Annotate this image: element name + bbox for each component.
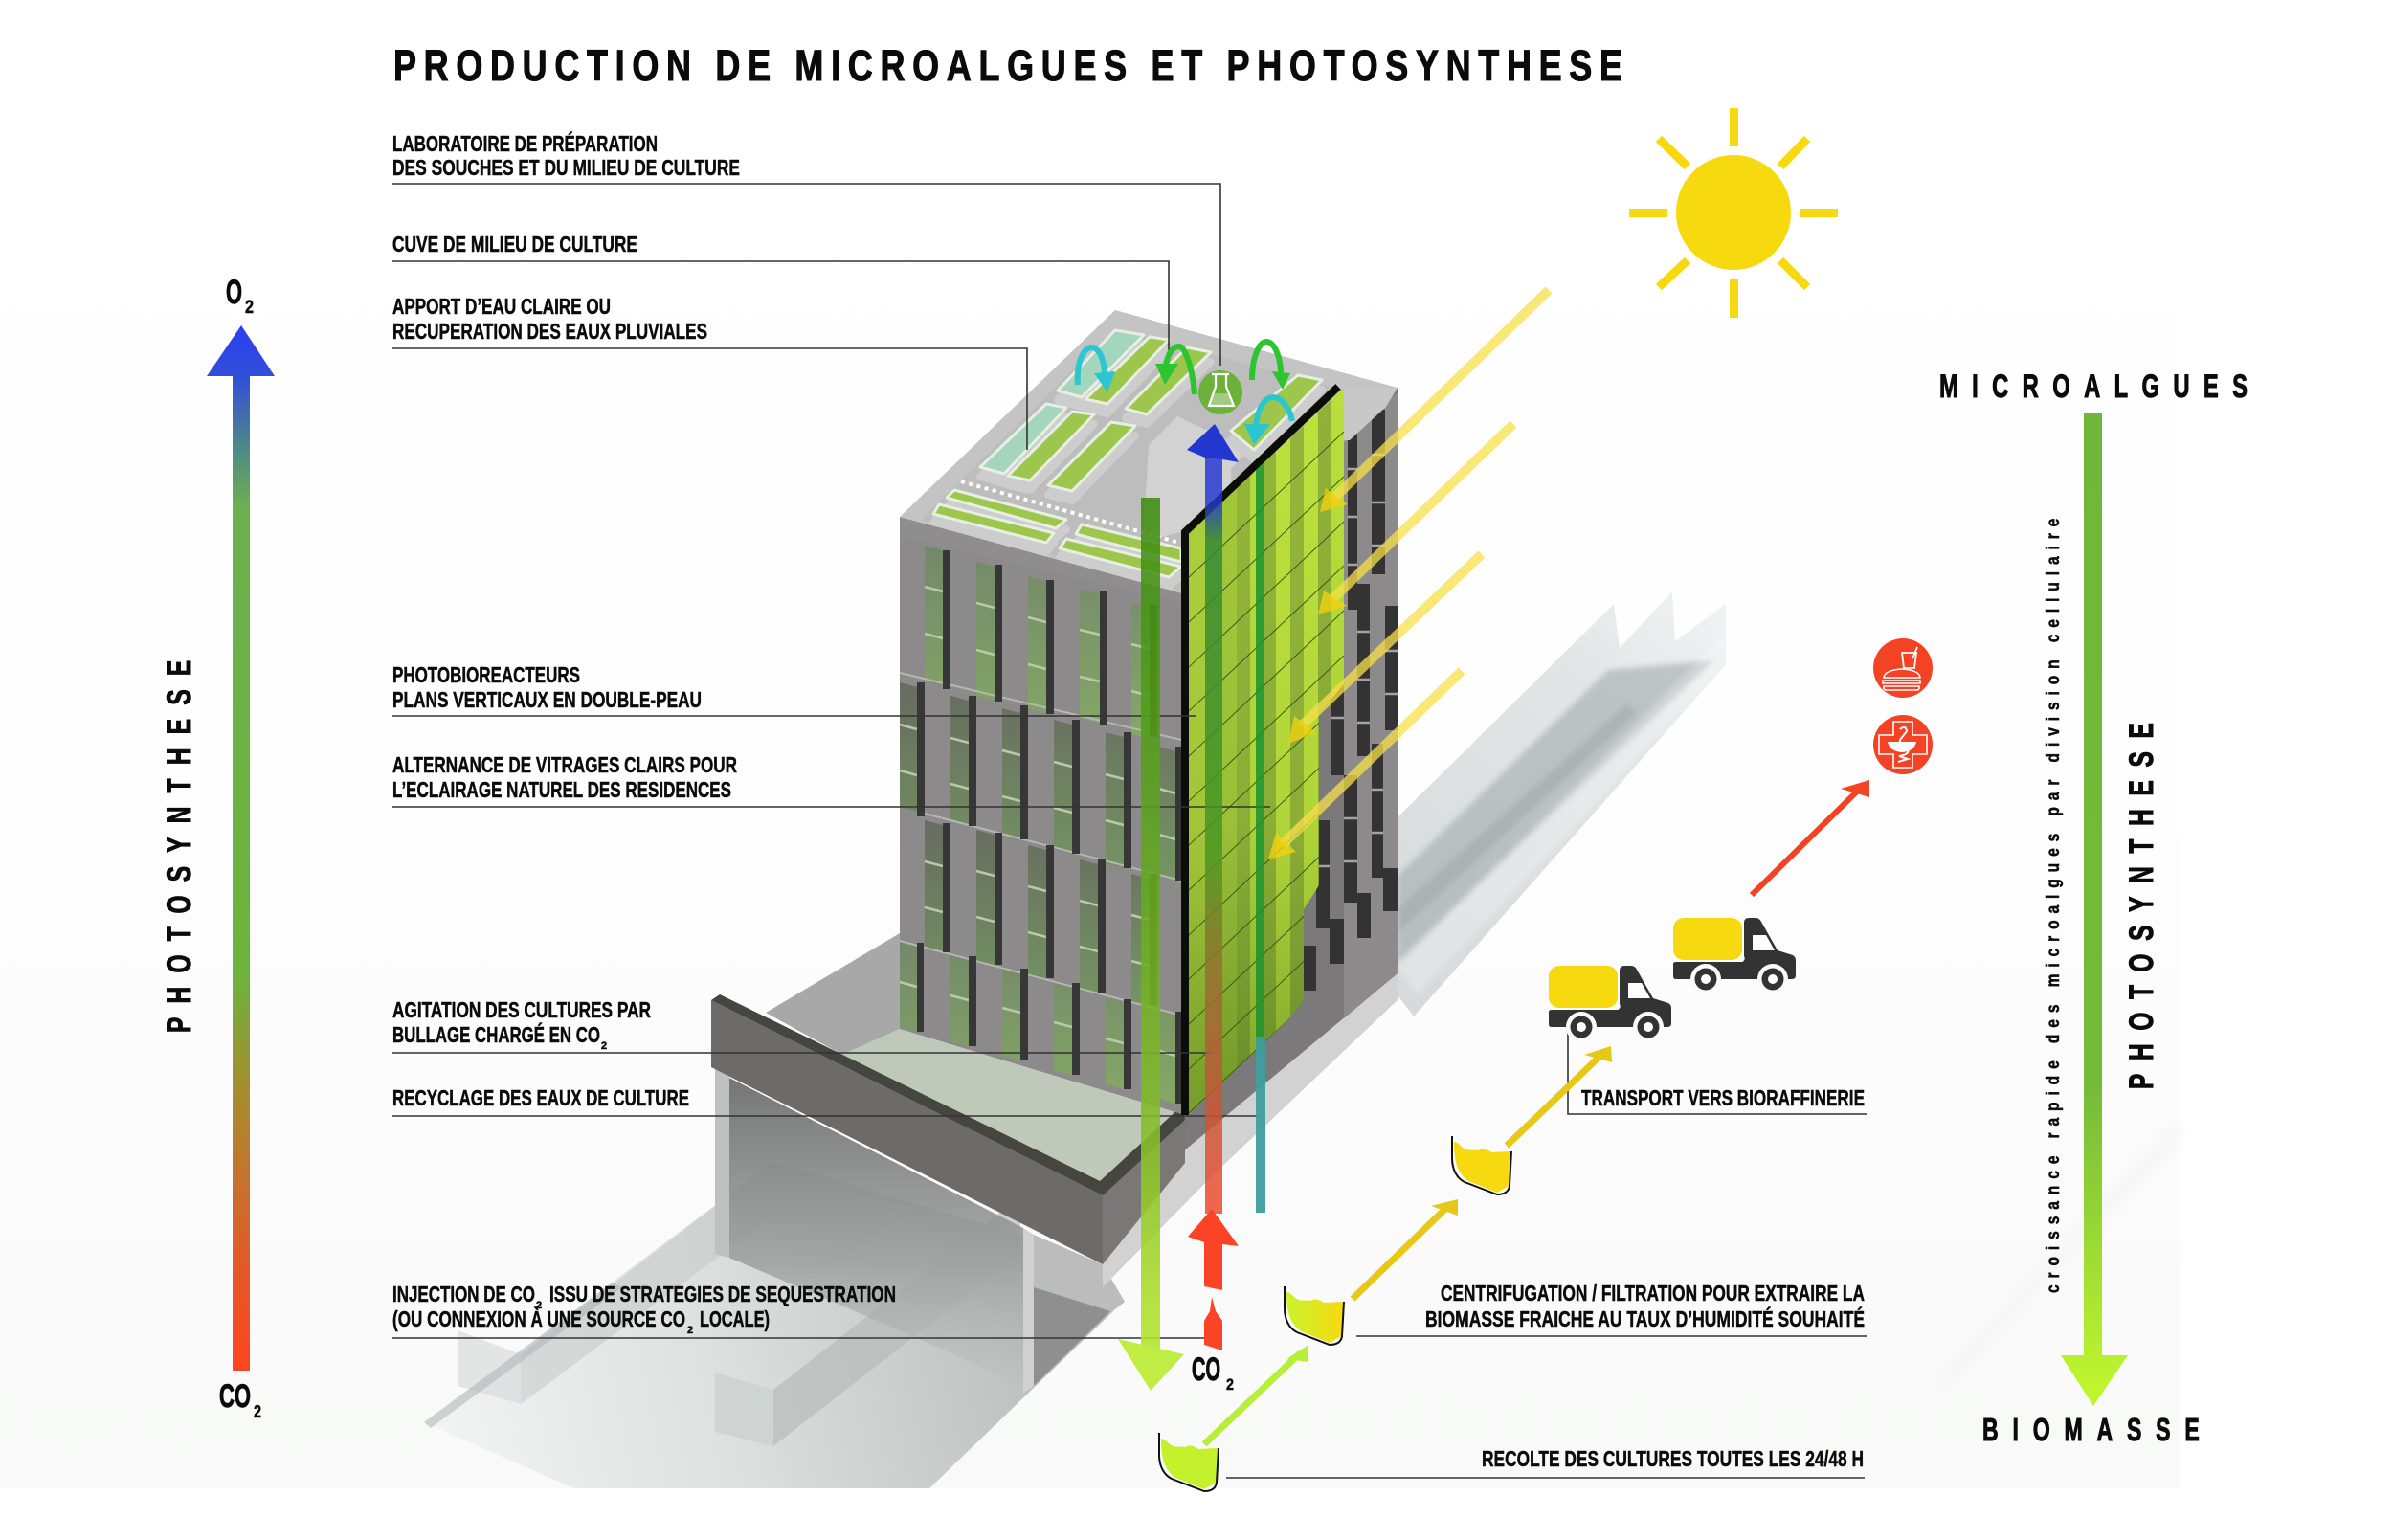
icon: truck back — [1549, 966, 1671, 1042]
icon: pharmacy — [1873, 715, 1933, 774]
left gradient arrow O2 / CO2 — [207, 325, 275, 1371]
label: cuve: CUVE DE MILIEU DE CULTURE — [392, 232, 637, 257]
label: apport eau — [392, 294, 707, 344]
label: photobioreacteurs: PHOTOBIOREACTEURS — [392, 662, 580, 687]
label: alternance: L’ECLAIRAGE NATUREL DES RESIDENCES — [392, 777, 731, 802]
label: apport eau: RECUPERATION DES EAUX PLUVIALES — [392, 319, 707, 344]
label: alternance — [392, 752, 737, 802]
label: injection: 2 — [536, 1300, 542, 1311]
label: injection: LOCALE) — [700, 1306, 770, 1331]
icon: food — [1873, 638, 1933, 698]
label: alternance: ALTERNANCE DE VITRAGES CLAIRS POUR — [392, 752, 737, 777]
label: recyclage: RECYCLAGE DES EAUX DE CULTURE — [392, 1085, 689, 1110]
icon: truck front — [1673, 918, 1796, 994]
label: photosynthese left: PHOTOSYNTHESE — [162, 660, 198, 1033]
label: agitation: BULLAGE CHARGÉ EN CO — [392, 1021, 600, 1047]
roof circulation arrows — [1078, 342, 1292, 445]
label: CO2 left: 2 — [254, 1402, 261, 1421]
label: CO2 left: CO — [219, 1378, 251, 1415]
ground shadow of the building, right — [1398, 591, 1726, 1016]
label: centrifugation — [1425, 1281, 1865, 1331]
label: photobioreacteurs — [392, 662, 702, 712]
label: agitation: 2 — [601, 1040, 607, 1052]
centrifuged beaker lime-yellow — [1285, 1286, 1344, 1345]
label: centrifugation: CENTRIFUGATION / FILTRATION POUR EXTRAIRE LA — [1441, 1281, 1865, 1306]
label: CO2 injection: 2 — [1226, 1375, 1234, 1394]
double-skin green photobioreactor panel — [1189, 383, 1344, 1120]
arrow: centrifugation to drying — [1353, 1199, 1458, 1299]
dotted line — [961, 481, 1179, 543]
label: injection — [392, 1282, 896, 1336]
label: O2: 2 — [245, 298, 254, 318]
label: photobioreacteurs: PLANS VERTICAUX EN DOUBLE-PEAU — [392, 687, 702, 712]
leader lines — [392, 184, 1867, 1478]
label: injection: INJECTION DE CO — [392, 1282, 535, 1306]
left facade — [900, 517, 1185, 1115]
tank walls — [933, 340, 1322, 587]
sunlight arrows — [1268, 290, 1549, 859]
clear water tanks — [980, 330, 1144, 474]
harvest beaker lime — [1159, 1433, 1219, 1491]
label: laboratoire: LABORATOIRE DE PRÉPARATION — [392, 130, 658, 156]
arrow: culture medium — [1155, 346, 1195, 394]
label: injection: ISSU DE STRATEGIES DE SEQUESTRATION — [549, 1282, 896, 1306]
label: injection: 2 — [687, 1325, 693, 1336]
label: microalgues: MICROALGUES — [1939, 368, 2248, 405]
right gradient arrow microalgues to biomasse — [2061, 413, 2128, 1406]
label: agitation — [392, 997, 651, 1052]
black corner edge — [1185, 387, 1338, 1115]
arrow: to transport — [1507, 1046, 1612, 1146]
label: agitation: AGITATION DES CULTURES PAR — [392, 997, 651, 1022]
dried beaker yellow — [1452, 1136, 1511, 1194]
label: centrifugation: BIOMASSE FRAICHE AU TAUX D’HUMIDITÉ SOUHAITÉ — [1425, 1306, 1865, 1331]
title: PRODUCTION DE MICROALGUES ET PHOTOSYNTHESE — [393, 41, 1622, 90]
label: apport eau: APPORT D’EAU CLAIRE OU — [392, 294, 611, 319]
right facade — [1182, 388, 1398, 1149]
label: injection: (OU CONNEXION À UNE SOURCE CO — [392, 1306, 685, 1331]
label: laboratoire: DES SOUCHES ET DU MILIEU DE CULTURE — [392, 155, 740, 180]
label: CO2 injection: CO — [1192, 1351, 1220, 1388]
label: croissance rapide: croissance rapide des microalgues par division cellulaire — [2043, 518, 2063, 1293]
arrow: to biorefinery — [1752, 780, 1869, 895]
icon: laboratory flask — [1198, 370, 1242, 414]
arrow: harvest to centrifugation — [1204, 1345, 1308, 1444]
label: recolte: RECOLTE DES CULTURES TOUTES LES 24/48 H — [1482, 1446, 1864, 1471]
label: transport: TRANSPORT VERS BIORAFFINERIE — [1581, 1085, 1865, 1110]
icon: sun — [1629, 108, 1838, 318]
flow: recycled culture water — [1256, 471, 1265, 1213]
green culture tanks — [933, 337, 1322, 577]
arrow: clear water — [1078, 347, 1115, 392]
faint diagonal reflection — [1943, 1127, 2180, 1383]
arrow: recycling — [1244, 397, 1292, 445]
flow: biomass arrow down — [1118, 498, 1184, 1391]
label: photosynthese right: PHOTOSYNTHESE — [2124, 723, 2160, 1089]
flow: CO2 in, O2 out arrow — [1187, 424, 1239, 1350]
arrow: culture medium right — [1252, 342, 1290, 390]
label: O2: O — [226, 274, 242, 311]
label: biomasse: BIOMASSE — [1982, 1413, 2200, 1448]
tower — [900, 310, 1398, 1149]
roof with culture tanks — [900, 310, 1398, 593]
podium under the tower — [711, 933, 1398, 1393]
label: laboratoire — [392, 130, 740, 180]
ground shadow of the building, left — [424, 1162, 1114, 1488]
